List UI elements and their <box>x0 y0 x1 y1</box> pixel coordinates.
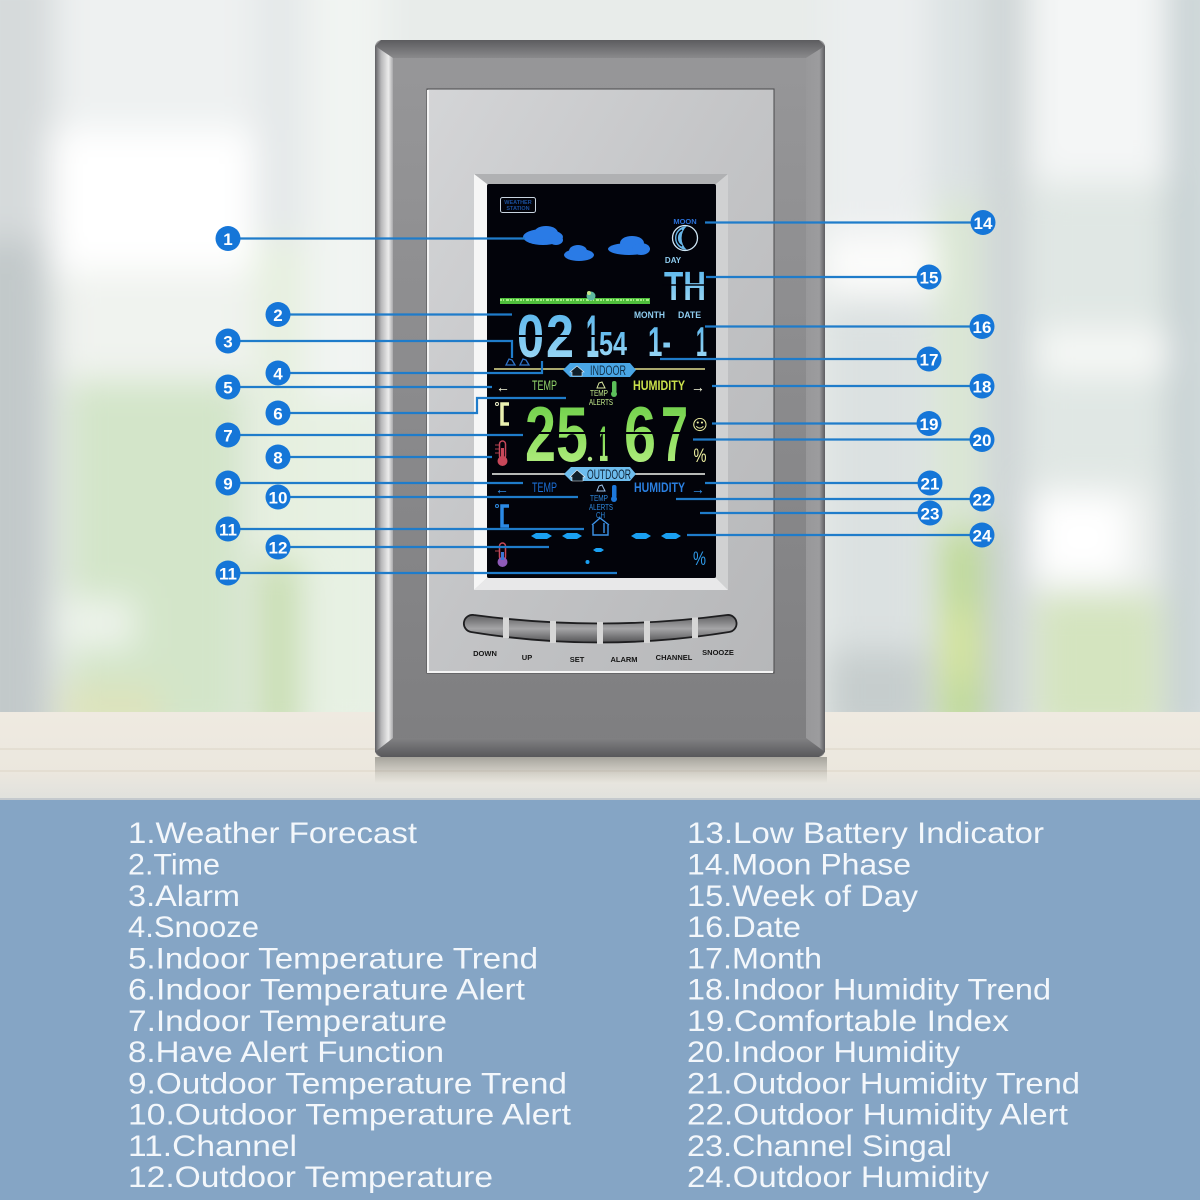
legend column 13 to 24: 17.Month <box>687 942 822 976</box>
month and date: DATE <box>678 310 701 321</box>
button labels <box>473 648 734 664</box>
button labels: ALARM <box>610 655 638 664</box>
screen bezel <box>474 174 728 590</box>
time display: 54 <box>599 325 627 362</box>
day of week: DAY <box>665 256 682 265</box>
indoor humidity reading: 6 <box>624 390 656 478</box>
icon: grass and flower <box>500 291 650 304</box>
callout 8: 8 <box>273 448 283 468</box>
callout 15: 15 <box>920 268 938 288</box>
indoor unit celsius <box>496 402 509 424</box>
legend column 13 to 24: 23.Channel Singal <box>687 1130 952 1163</box>
indoor row labels: → <box>691 379 705 396</box>
callout 17: 17 <box>920 350 938 370</box>
time display: 1 <box>586 303 599 370</box>
callout 6 <box>266 398 566 426</box>
callout 21 <box>705 470 942 496</box>
legend column 13 to 24: 16.Date <box>687 911 801 944</box>
button labels: UP <box>522 653 532 662</box>
button labels: SET <box>570 655 585 664</box>
callout 12 <box>266 534 549 560</box>
legend column 13 to 24: 22.Outdoor Humidity Alert <box>687 1098 1069 1132</box>
legend column 13 to 24: 18.Indoor Humidity Trend <box>687 974 1051 1006</box>
callout 23: 23 <box>921 504 939 524</box>
indoor alert icon: ALERTS <box>589 398 613 407</box>
icon: forecast clouds <box>523 226 650 261</box>
panel: feature legend <box>0 800 1200 1200</box>
icon: channel house <box>592 518 609 535</box>
outdoor alert icon <box>589 485 617 520</box>
callouts right <box>660 210 996 548</box>
weather station badge: STATION <box>506 206 530 212</box>
legend column 1 to 12: 3.Alarm <box>128 880 240 913</box>
indoor alert icon: TEMP <box>590 389 608 398</box>
callout 23 <box>700 500 942 526</box>
callout 5: 5 <box>223 378 233 398</box>
callout 2: 2 <box>273 306 283 325</box>
callout 24: 24 <box>973 526 992 546</box>
icon: indoor thermometer <box>495 441 508 466</box>
outdoor alert icon: ALERTS <box>589 503 613 512</box>
legend column 1 to 12: 4.Snooze <box>128 911 259 944</box>
button labels: SNOOZE <box>702 648 734 657</box>
legend column 13 to 24: 21.Outdoor Humidity Trend <box>687 1068 1080 1100</box>
callout 21: 21 <box>921 474 939 494</box>
callout 17 <box>660 346 942 372</box>
callout 4 <box>266 360 542 386</box>
callout 10 <box>266 484 578 510</box>
icon: moon phase: MOON <box>673 217 697 226</box>
callout 7: 7 <box>223 426 233 446</box>
legend column 1 to 12: 5.Indoor Temperature Trend <box>128 942 538 976</box>
outdoor row labels <box>495 480 705 498</box>
indoor percent: % <box>694 446 707 467</box>
callout 1: 1 <box>223 230 233 249</box>
indoor temperature reading <box>520 390 612 478</box>
callout 1 <box>216 226 525 251</box>
icon: moon phase <box>672 217 698 250</box>
callout 19 <box>712 411 942 436</box>
callout 9 <box>216 470 523 496</box>
indoor divider <box>494 363 705 378</box>
callout 4: 4 <box>273 364 283 384</box>
callouts left <box>216 226 617 586</box>
time display <box>516 303 627 370</box>
weather station badge: WEATHER <box>504 200 532 206</box>
outdoor row labels: ← <box>495 481 509 498</box>
callout 16: 16 <box>973 318 991 337</box>
legend column 1 to 12: 10.Outdoor Temperature Alert <box>128 1098 572 1132</box>
legend column 13 to 24: 20.Indoor Humidity <box>687 1036 960 1069</box>
outdoor alert icon: TEMP <box>590 494 608 503</box>
callout 11 upper <box>216 516 584 542</box>
indoor row labels: ← <box>496 379 510 396</box>
indoor row labels: TEMP <box>532 378 557 393</box>
callout 14: 14 <box>974 214 993 233</box>
control buttons <box>464 615 737 644</box>
callout 3 <box>216 328 512 358</box>
callout 19: 19 <box>920 415 938 434</box>
button labels: DOWN <box>473 649 497 658</box>
callout 18: 18 <box>973 378 991 396</box>
device outer frame <box>375 40 825 757</box>
callout 3: 3 <box>223 332 233 352</box>
outdoor alert icon: CH <box>596 511 605 520</box>
month and date: MONTH <box>634 310 665 321</box>
callout 15 <box>706 264 942 290</box>
button labels: CHANNEL <box>656 653 693 662</box>
indoor row labels: HUMIDITY <box>633 378 685 393</box>
outdoor divider <box>492 467 705 482</box>
callout 10: 10 <box>269 488 287 508</box>
legend column 1 to 12: 9.Outdoor Temperature Trend <box>128 1068 567 1100</box>
weather station device: 1 <box>599 416 608 472</box>
legend column 13 to 24: 19.Comfortable Index <box>687 1005 1009 1038</box>
month and date: 1- <box>648 318 671 365</box>
callout 16 <box>705 314 994 339</box>
callout 18 <box>712 374 994 398</box>
outdoor percent: % <box>693 549 706 570</box>
legend column 13 to 24: 14.Moon Phase <box>687 848 911 882</box>
day of week <box>662 256 708 309</box>
outdoor divider: OUTDOOR <box>587 467 631 482</box>
callout 7 <box>216 422 523 448</box>
legend column 1 to 12: 11.Channel <box>128 1130 297 1163</box>
callout 9: 9 <box>223 474 233 494</box>
time display: 2 <box>546 303 574 370</box>
legend column 1 to 12: 12.Outdoor Temperature <box>128 1161 493 1194</box>
icon: comfort smiley: ☺ <box>692 416 708 434</box>
legend column 13 to 24: 15.Week of Day <box>687 880 918 913</box>
callout 2 <box>266 302 512 327</box>
background: blurred window scene <box>0 0 1200 760</box>
legend column 1 to 12 <box>128 817 572 1194</box>
wooden table top <box>0 712 1200 800</box>
callout 14 <box>705 210 996 235</box>
outdoor unit celsius <box>496 504 509 526</box>
indoor divider: INDOOR <box>590 363 626 378</box>
callout 11 lower <box>216 560 617 586</box>
device silver panel <box>427 89 774 673</box>
legend column 13 to 24: 24.Outdoor Humidity <box>687 1161 989 1194</box>
callout 20 <box>693 427 994 452</box>
callout 12: 12 <box>269 538 287 558</box>
icon: outdoor thermometer <box>495 543 508 567</box>
weather station device <box>375 40 825 757</box>
outdoor dash readings <box>531 533 681 564</box>
time display: 0 <box>517 303 544 370</box>
legend column 13 to 24: 13.Low Battery Indicator <box>687 817 1044 850</box>
callout 8 <box>266 444 492 470</box>
indoor humidity reading <box>622 390 690 478</box>
indoor temperature reading: 5 <box>556 390 588 478</box>
legend column 1 to 12: 7.Indoor Temperature <box>128 1005 447 1038</box>
indoor alert icon <box>589 381 617 407</box>
callout 5 <box>216 374 492 400</box>
callout 11 upper: 11 <box>219 520 237 540</box>
LCD screen <box>487 184 716 578</box>
day of week: TH <box>664 263 706 309</box>
legend column 1 to 12: 2.Time <box>128 848 220 882</box>
legend column 1 to 12: 8.Have Alert Function <box>128 1036 444 1069</box>
callout 6: 6 <box>273 404 283 424</box>
weather station device: 1 <box>696 318 707 365</box>
weather station badge <box>500 198 536 212</box>
legend column 13 to 24 <box>687 817 1080 1194</box>
indoor humidity reading: 7 <box>661 390 688 478</box>
callout 22: 22 <box>973 490 991 510</box>
outdoor row labels: → <box>691 481 705 498</box>
legend column 1 to 12: 1.Weather Forecast <box>128 817 418 850</box>
callout 22 <box>676 486 994 512</box>
indoor row labels <box>496 378 705 396</box>
callout 20: 20 <box>973 431 991 450</box>
indoor temperature reading: 2 <box>525 390 556 478</box>
month and date <box>634 310 707 365</box>
legend column 1 to 12: 6.Indoor Temperature Alert <box>128 974 526 1006</box>
callout 11 lower: 11 <box>219 564 237 584</box>
icon: alarm bells <box>506 359 529 365</box>
outdoor row labels: TEMP <box>532 480 557 495</box>
callout 24 <box>687 522 994 548</box>
outdoor row labels: HUMIDITY <box>634 480 685 495</box>
